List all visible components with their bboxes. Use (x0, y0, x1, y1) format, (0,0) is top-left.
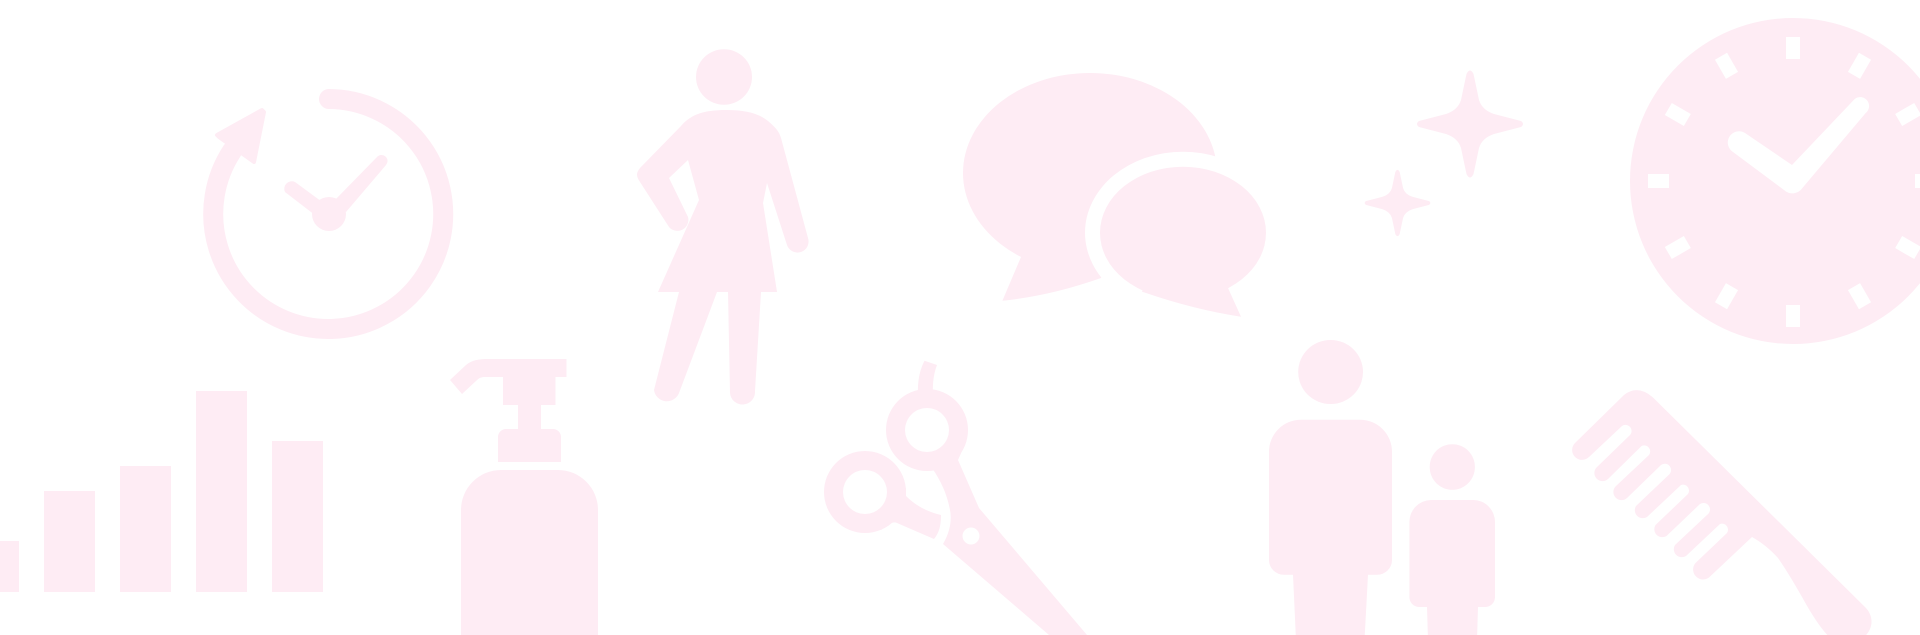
icon: small sparkle (1365, 170, 1430, 236)
icon: adult figure (1269, 340, 1392, 635)
icon: large sparkle (1417, 70, 1523, 178)
icon: pump bottle (450, 359, 598, 635)
icon: comb (1572, 390, 1872, 635)
icon: child figure (1409, 444, 1495, 635)
icon: speech bubbles (963, 73, 1281, 317)
icon: clock with circular arrow (213, 99, 443, 329)
bar chart icon (0, 391, 323, 592)
icon: standing woman (637, 49, 809, 405)
icon: wall clock with check hands (1630, 18, 1920, 344)
icon: scissors (824, 361, 1087, 635)
